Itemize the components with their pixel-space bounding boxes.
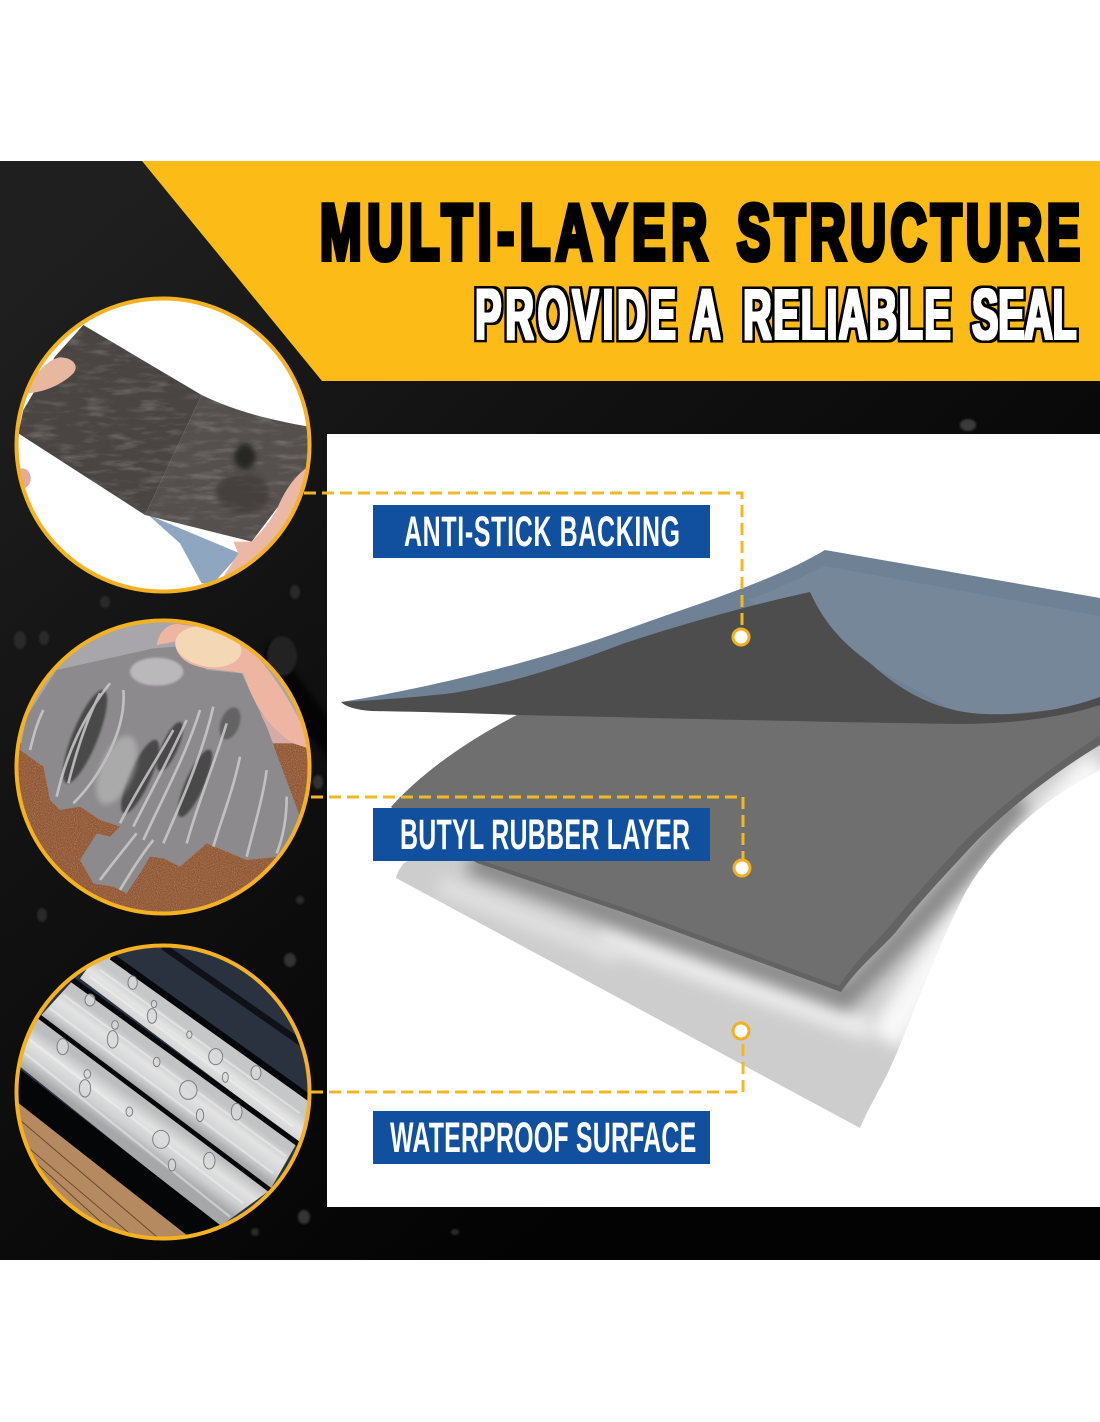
silver strip 2 [40,980,297,1190]
circle: anti-stick backing photo [13,298,320,592]
label: waterproof surface: WATERPROOF SURFACE [390,1114,696,1162]
title [320,189,1080,276]
butyl rubber layer [391,700,1100,992]
circle border 1 [16,298,310,592]
tape wrinkle texture [21,330,308,538]
label: anti-stick backing: ANTI-STICK BACKING [404,508,680,556]
title: MULTI-LAYER [320,189,707,276]
circle: butyl rubber photo [18,622,308,912]
black gaps [39,957,310,1190]
thumb left [28,357,76,394]
waterproof surface layer [396,745,1100,1128]
wood trim [19,1104,186,1236]
subtitle [475,276,1077,355]
black fascia [13,1067,220,1240]
subtitle: A [692,276,721,355]
infographic [0,161,1100,1260]
silver strip 3 [20,1017,270,1227]
dark stretch cavities [55,686,244,821]
dark underside of backing [341,592,1100,724]
right hand [224,468,306,576]
water droplets [57,976,261,1171]
header banner [142,161,1100,381]
subtitle: RELIABLE [743,276,951,355]
finger left lower [20,468,31,488]
marker dot 1 [733,629,749,645]
circle: waterproof surface photo [10,945,310,1250]
butyl rubber layer face [391,700,1100,986]
circle border 2 [16,620,310,914]
circle border 3 [16,946,310,1238]
white diagram panel [327,434,1100,1207]
lighter highlights [130,658,183,686]
blue liner [148,515,240,583]
title: STRUCTURE [737,189,1080,276]
subtitle: SEAL [972,276,1077,355]
strip ridges [25,970,300,1217]
anti-stick backing sheet [341,550,1100,718]
waterproof layer highlights [440,765,1100,1040]
silver strip 1 [80,957,310,1143]
fingers [157,624,313,750]
layered structure diagram [341,550,1100,1128]
tape left section [18,325,202,515]
subtitle: PROVIDE [475,276,676,355]
dark background band [0,161,1100,1260]
sand grain [20,743,308,815]
grey backdrop [20,622,300,744]
label: butyl rubber layer: BUTYL RUBBER LAYER [400,811,690,859]
tape right section [145,395,308,542]
light stretch strands [30,683,287,890]
butyl mass [20,647,300,893]
backing sheet inner shade [1009,710,1052,714]
marker dot 3 [733,1023,749,1039]
tape shading [234,444,256,469]
connector 3 dashed [311,1040,743,1092]
marker dot 2 [734,860,750,876]
connector 2 dashed [311,797,743,860]
connector 1 dashed [304,493,742,630]
pink film [260,714,294,744]
dark roof panel ribs [163,947,307,1047]
background water droplets [14,419,976,1236]
